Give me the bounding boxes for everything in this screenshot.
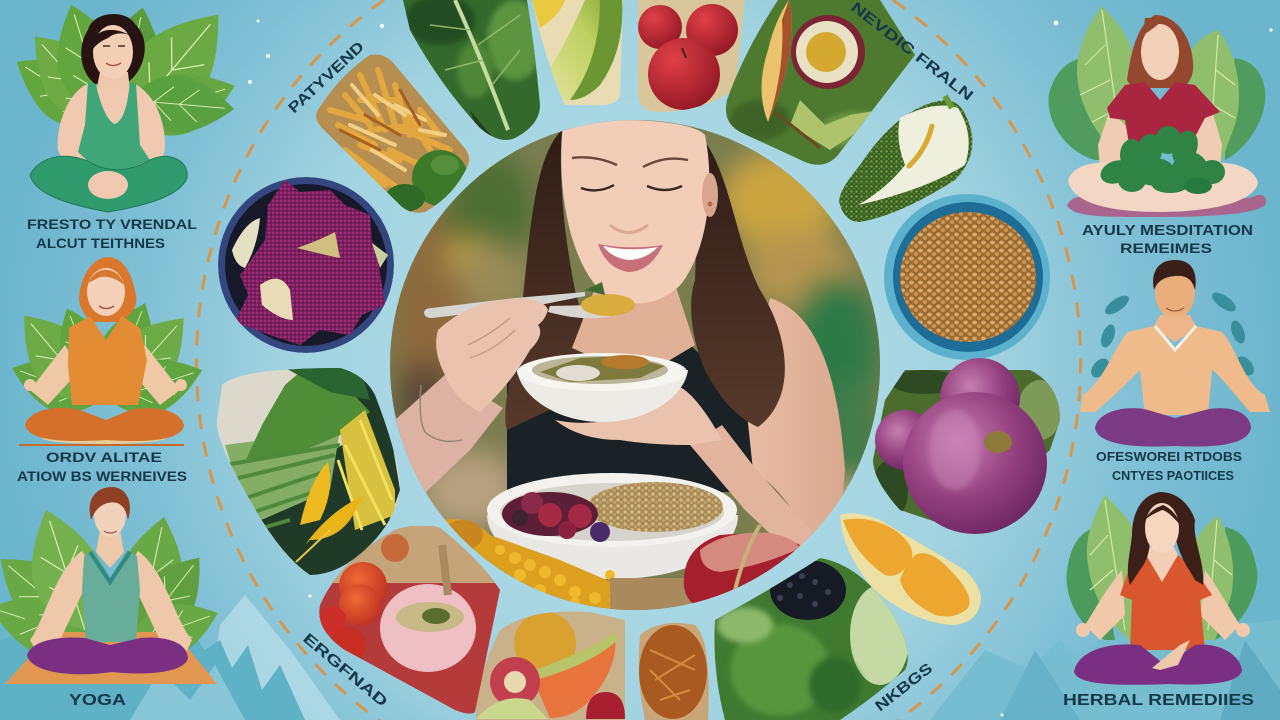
dashed orange ring: [196, 0, 1081, 720]
figure: maroon woman with spinach: [1049, 6, 1266, 256]
food panel: orange slice: [840, 513, 981, 625]
label: [27, 216, 197, 251]
figure: yoga woman on mat: [0, 487, 227, 709]
icon: leaves behind woman: [0, 499, 227, 669]
label: [1096, 450, 1242, 483]
hair front right: [691, 135, 785, 427]
food panel: greens and yellow peppers: [217, 368, 401, 576]
ring label: bottom left: ERGFNAD: [299, 630, 391, 711]
label: FRESTO TY VRENDAL: [27, 216, 197, 232]
figure: green meditating woman: [1, 0, 247, 251]
hand holding spoon: [436, 298, 548, 412]
food panel: grain bowl: [884, 194, 1050, 360]
hand under small bowl: [555, 388, 722, 445]
food panel: spice pot: [638, 618, 712, 720]
food panel: lettuce and blackberries: [712, 556, 912, 720]
figure: herbal remedies woman: [1063, 492, 1257, 709]
label: AYULY MESDITATION: [1082, 223, 1253, 239]
forearm right: [690, 425, 812, 562]
mat: [5, 632, 217, 684]
spoon: [424, 292, 585, 318]
label: ALCUT TEITHNES: [36, 235, 165, 251]
icon: large leaves behind woman: [1067, 495, 1257, 640]
neck and chest: [572, 288, 695, 360]
arm left and wrist: [395, 373, 503, 495]
food panel: purple kale bowl: [218, 177, 394, 353]
food panel: golden fries and greens: [313, 52, 471, 214]
food panel: assorted fruit: [475, 610, 625, 720]
food panel: tomatoes and pink bowl: [318, 526, 502, 716]
food panel: mango and sliced fruit: [722, 0, 917, 168]
label: [17, 450, 187, 484]
icon: leaves behind woman: [1, 294, 210, 425]
corn and citrus foreground: [443, 519, 640, 610]
icon: large leaves behind woman: [1049, 6, 1265, 160]
figure: meditating man: [1080, 260, 1270, 483]
label: HERBAL REMEDIIES: [1063, 692, 1254, 709]
spinach bunch: [1097, 124, 1225, 194]
label: OFESWOREI RTDOBS: [1096, 450, 1242, 464]
background: sparkles: [248, 20, 1273, 716]
central photo: woman eating a healthy bowl: [390, 120, 880, 610]
large bowl with berries and grains: [487, 473, 738, 579]
figure: orange meditating woman: [1, 257, 210, 484]
shoulder and upper arm right: [745, 298, 845, 540]
label: [1082, 223, 1253, 256]
food panel: red apples: [638, 0, 745, 112]
photo background: [390, 120, 880, 610]
food panel: lime: [532, 0, 624, 106]
food panel: kale leaf: [403, 0, 543, 142]
label: ATIOW BS WERNEIVES: [17, 469, 187, 484]
food panel: halved zucchini: [839, 96, 972, 222]
hair back left: [505, 130, 590, 430]
red drink and apple: [610, 525, 810, 610]
black tank top: [507, 345, 753, 492]
small bowl: [517, 353, 688, 422]
ring label: top left: PATYVEND: [285, 38, 368, 117]
icon: teal leaves around man: [1088, 289, 1257, 381]
spoonful of food: [548, 282, 635, 318]
background: left mountains: [0, 595, 340, 720]
background: right mountains: [930, 620, 1280, 720]
food panel: purple plums: [872, 358, 1062, 534]
label: ORDV ALITAE: [46, 450, 162, 465]
label: YOGA: [69, 692, 127, 709]
label: CNTYES PAOTIICES: [1112, 469, 1234, 483]
face: [561, 120, 718, 304]
icon: leaves behind woman: [1, 0, 247, 149]
label: REMEIMES: [1120, 241, 1212, 256]
ring label: bottom right: NKBGS: [872, 660, 936, 715]
ring label: top right: NEVDIC FRALN: [848, 0, 976, 105]
